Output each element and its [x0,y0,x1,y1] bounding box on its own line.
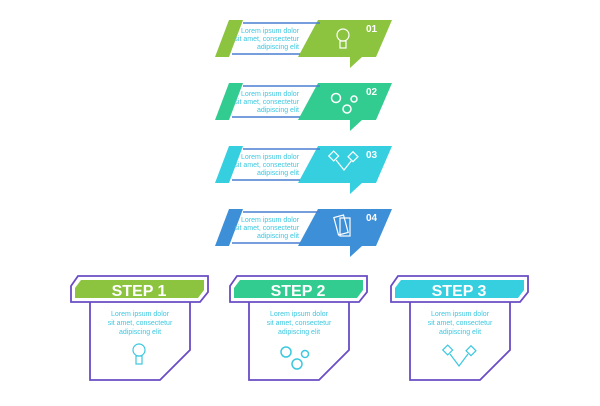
step 3: STEP 3 [432,283,487,300]
text 4: Lorem ipsum dolor [241,217,300,224]
text 3: Lorem ipsum dolor [241,154,300,161]
step 2 [230,276,367,380]
row 2 [215,83,392,131]
step 1: STEP 1 [112,283,167,300]
number 03: 03 [366,150,378,161]
step 2: sit amet, consectetur [267,320,332,327]
icon: handshake [329,151,358,170]
step 1: adipiscing elit [119,329,161,336]
icon: bulb [337,29,349,48]
text 3: adipiscing elit [257,170,299,177]
text 3: sit amet, consectetur [234,162,300,169]
icon: gears [332,94,357,113]
text 2: adipiscing elit [257,107,299,114]
row 3 [215,146,392,194]
text 1: sit amet, consectetur [234,36,300,43]
number 02: 02 [366,87,378,98]
text 1: adipiscing elit [257,44,299,51]
icon: gears [281,347,308,369]
step 1: sit amet, consectetur [108,320,173,327]
step 3: sit amet, consectetur [428,320,493,327]
row 4 [215,209,392,257]
step 3: adipiscing elit [439,329,481,336]
step 2: STEP 2 [271,283,326,300]
step 1: Lorem ipsum dolor [111,311,170,318]
step 1 [71,276,208,380]
text 2: Lorem ipsum dolor [241,91,300,98]
text 2: sit amet, consectetur [234,99,300,106]
icon: money [334,215,350,236]
step 3 [391,276,528,380]
icon: bulb [133,344,145,364]
step 2: adipiscing elit [278,329,320,336]
step 3: Lorem ipsum dolor [431,311,490,318]
step 2: Lorem ipsum dolor [270,311,329,318]
number 04: 04 [366,213,378,224]
text 4: adipiscing elit [257,233,299,240]
icon: handshake [443,345,476,366]
row 1 [215,20,392,68]
text 4: sit amet, consectetur [234,225,300,232]
number 01: 01 [366,24,378,35]
text 1: Lorem ipsum dolor [241,28,300,35]
